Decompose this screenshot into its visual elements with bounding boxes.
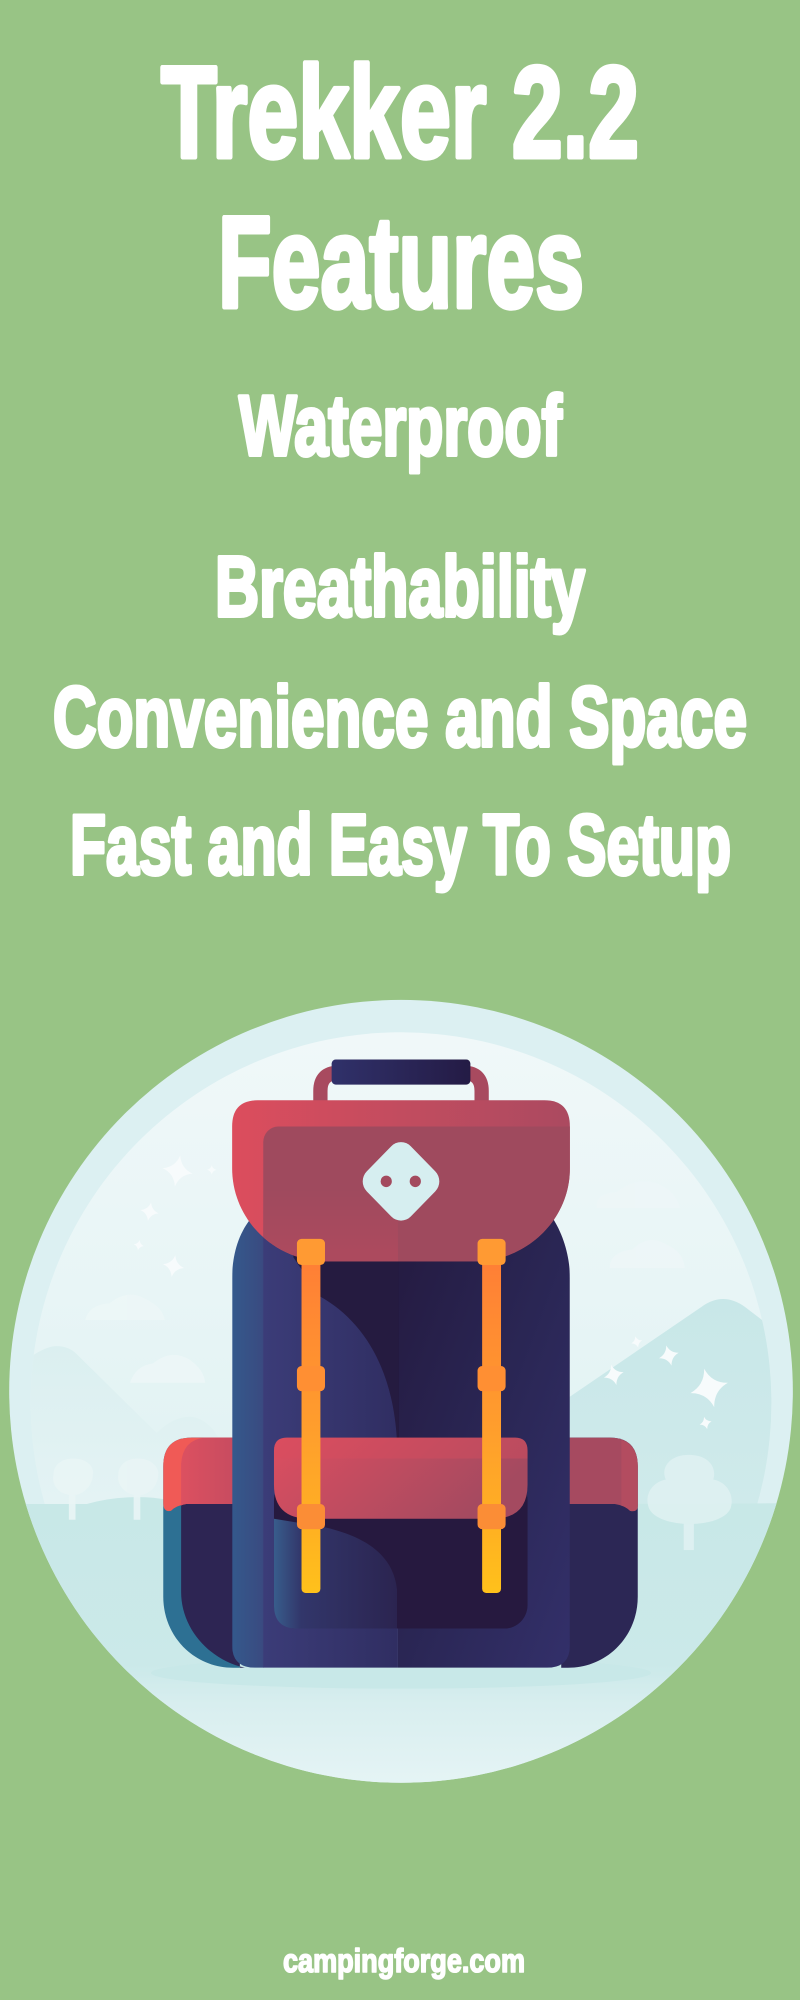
scene circle	[0, 980, 800, 1817]
footer: site name: campingforge.com	[283, 1942, 525, 1979]
trees	[53, 1455, 732, 1550]
front pocket	[274, 1438, 528, 1629]
illustration: backpack in circular scene	[0, 980, 800, 1817]
feature: Waterproof: Waterproof	[239, 379, 562, 474]
left side pocket	[163, 1438, 245, 1668]
right side pocket	[561, 1438, 638, 1668]
title: Features	[218, 189, 584, 335]
ground shadow	[151, 1657, 651, 1689]
title	[161, 39, 639, 335]
backpack handle	[320, 1059, 482, 1106]
flap badge	[357, 1136, 445, 1226]
backpack main body	[232, 1210, 570, 1670]
feature: Breathability: Breathability	[215, 540, 585, 635]
left strap with buckles	[297, 1239, 325, 1593]
sparkles	[133, 1153, 733, 1431]
right strap with buckles	[478, 1239, 506, 1593]
backpack top flap	[232, 1100, 570, 1262]
